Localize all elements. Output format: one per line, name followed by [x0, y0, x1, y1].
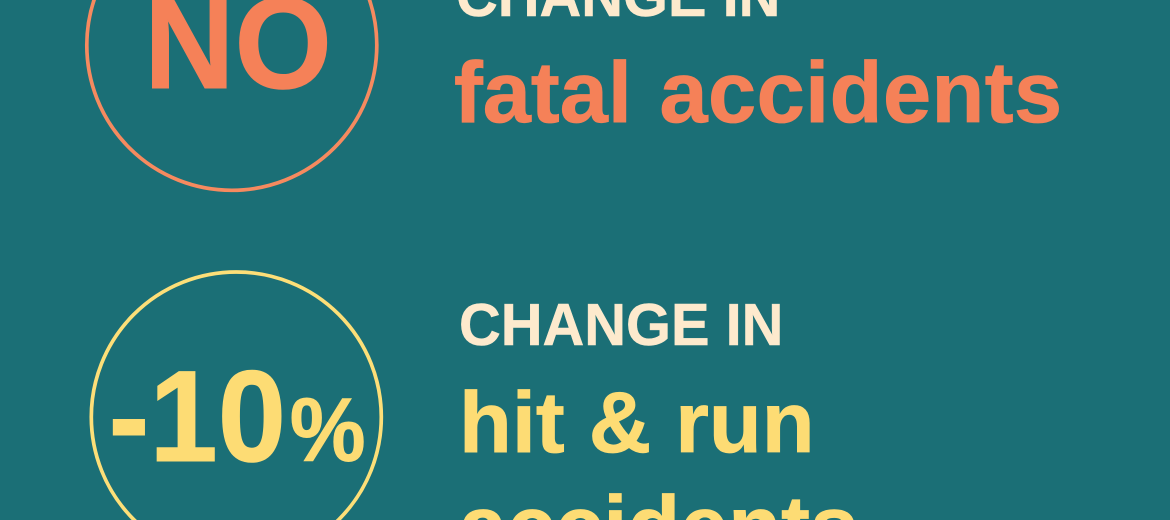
icon: circle with NO [87, 0, 377, 190]
text: change in fatal accidents [454, 0, 1063, 141]
text: change in hit and run accidents: CHANGE IN [459, 292, 783, 358]
panel: fatal accidents [87, 0, 1063, 190]
icon: circle with -10% [91, 272, 381, 520]
text: change in fatal accidents: fatal [454, 45, 632, 141]
panel: hit and run accidents [91, 272, 858, 520]
text: change in hit and run accidents [459, 292, 858, 520]
text: change in fatal accidents: accidents [660, 45, 1063, 141]
text: change in hit and run accidents: hit & run [459, 375, 815, 471]
icon: circle with -10%: -10% [108, 344, 365, 489]
